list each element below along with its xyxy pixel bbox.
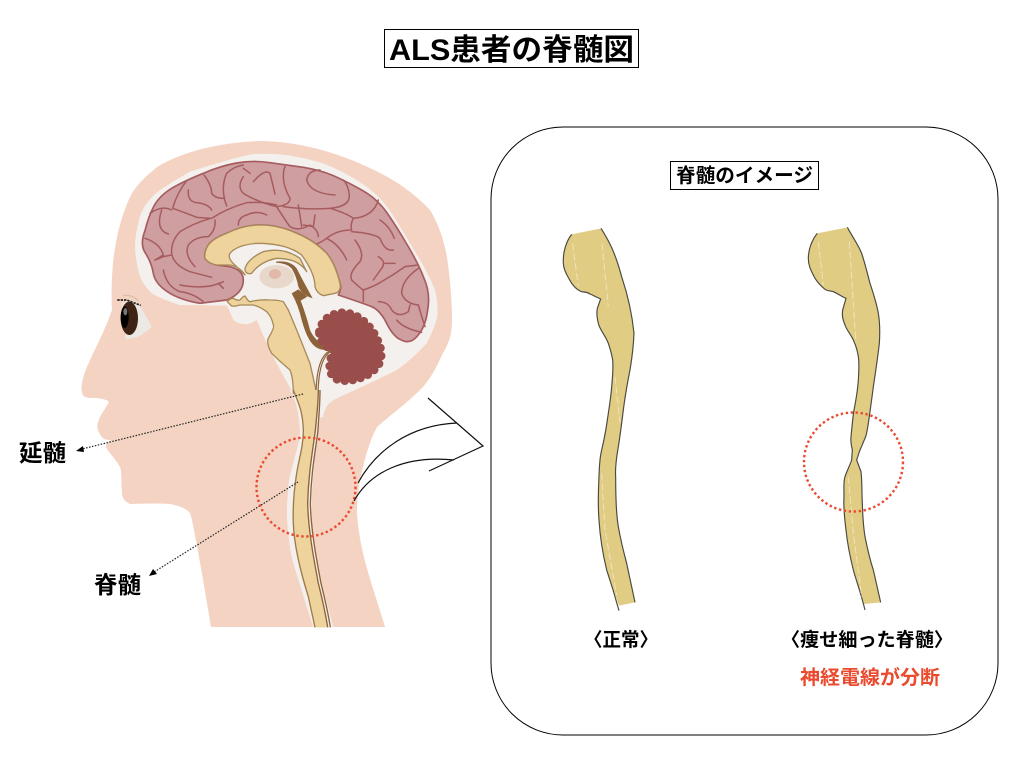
icon: eye — [117, 295, 152, 339]
cerebrospinal fluid space around the brain — [135, 154, 438, 417]
midbrain tegmentum (brown) — [276, 261, 313, 298]
cerebrum — [142, 161, 429, 342]
gyri lines — [145, 165, 425, 332]
spinal sheath — [287, 390, 343, 627]
normal spinal cord — [563, 228, 635, 611]
connector arrow lines — [354, 398, 483, 501]
panel heading: 脊髄のイメージ — [676, 164, 813, 187]
label: spinal cord: 脊髄 — [94, 572, 141, 598]
head illustration — [81, 141, 452, 627]
nerve lines — [316, 351, 331, 393]
leader: medulla — [76, 394, 303, 452]
caption: atrophied: 〈痩せ細った脊髄〉 — [781, 628, 953, 651]
red dotted circle: atrophy — [804, 412, 903, 512]
leader: spinal cord — [149, 482, 298, 576]
corpus callosum, brainstem and cerebellum — [205, 225, 381, 393]
title: ALS患者の脊髄図 — [389, 34, 634, 67]
label: medulla: 延髄 — [19, 440, 66, 466]
head silhouette — [81, 141, 452, 627]
corpus callosum — [205, 225, 340, 296]
spinal cord — [293, 390, 330, 627]
fornix — [245, 250, 307, 274]
cerebellum — [319, 313, 381, 381]
red dotted circle: head — [256, 438, 356, 536]
caption: normal: 〈正常〉 — [584, 629, 658, 651]
thalamus — [259, 265, 294, 288]
panel: spinal cord image — [491, 127, 998, 735]
atrophied spinal cord — [808, 227, 881, 610]
caption: nerve wires severed: 神経電線が分断 — [800, 666, 940, 689]
brainstem — [227, 296, 317, 393]
